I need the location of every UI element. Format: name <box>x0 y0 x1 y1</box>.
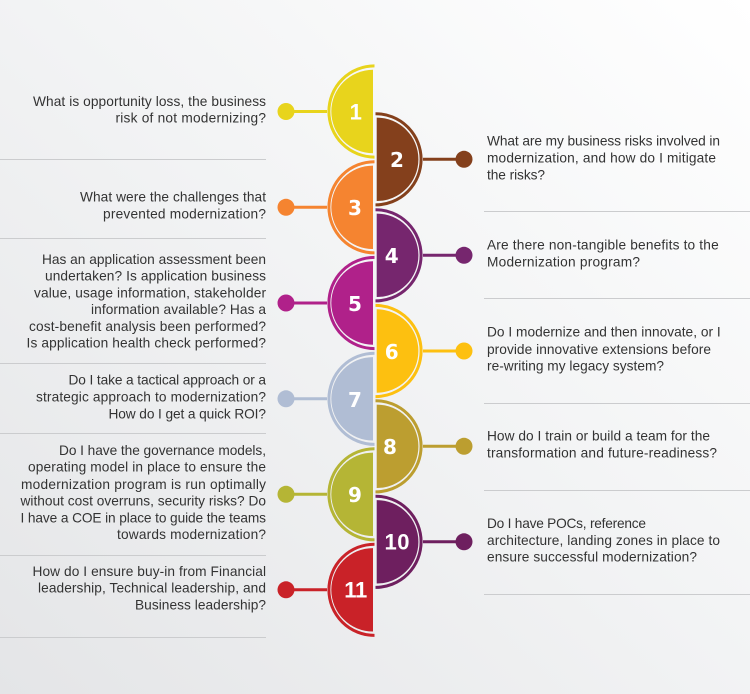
item 10: right semicircle with pointer: 10 <box>384 530 410 555</box>
text: item 7 question: Do I take a tactical approach or a <box>68 373 266 388</box>
item 5: left semicircle with pointer <box>278 257 374 349</box>
item 9: left semicircle with pointer: 9 <box>348 483 362 507</box>
text: item 5 question: cost-benefit analysis been performed? <box>29 319 266 334</box>
text: item 11 question <box>32 564 266 612</box>
item 7: left semicircle with pointer: 7 <box>348 388 362 412</box>
text: item 1 question <box>33 94 266 126</box>
text: item 2 question <box>487 134 720 182</box>
item 7: left semicircle with pointer <box>278 353 374 444</box>
text: item 6 question: Do I modernize and then innovate, or I <box>487 325 721 340</box>
item 11: left semicircle with pointer: 11 <box>344 578 367 603</box>
item 10: right semicircle with pointer <box>376 496 472 587</box>
text: item 11 question: How do I ensure buy-in from Financial <box>32 564 266 579</box>
text: item 7 question: strategic approach to modernization? <box>36 390 266 405</box>
item 8: right semicircle with pointer <box>376 401 472 492</box>
text: item 9 question: operating model in place to ensure the <box>28 460 266 475</box>
text: item 1 question: risk of not modernizing? <box>116 111 266 126</box>
item 6: right semicircle with pointer: 6 <box>385 340 399 364</box>
text: item 5 question: Has an application assessment been <box>42 252 266 267</box>
text: item 4 question: Are there non-tangible benefits to the <box>487 237 719 252</box>
text: item 7 question <box>36 373 266 421</box>
item 6: right semicircle with pointer <box>376 305 472 397</box>
text: item 4 question <box>487 237 719 270</box>
text: item 10 question: Do I have POCs, reference <box>487 516 646 531</box>
item 2: right semicircle with pointer: 2 <box>390 148 404 172</box>
text: item 7 question: How do I get a quick ROI? <box>108 406 266 421</box>
text: item 4 question: Modernization program? <box>487 255 640 270</box>
text: item 10 question: architecture, landing zones in place to <box>487 533 720 548</box>
item 11: left semicircle with pointer <box>278 544 374 635</box>
text: item 5 question: information available? Has a <box>91 302 266 317</box>
text: item 5 question: Is application health check performed? <box>26 336 266 351</box>
text: item 3 question: What were the challenges that <box>80 190 266 205</box>
text: item 3 question: prevented modernization? <box>103 206 266 221</box>
item 1: left semicircle with pointer <box>278 66 374 157</box>
item 4: right semicircle with pointer: 4 <box>385 244 399 268</box>
item 1: left semicircle with pointer: 1 <box>350 99 362 124</box>
item 8: right semicircle with pointer: 8 <box>383 435 397 459</box>
text: item 3 question <box>80 190 266 221</box>
text: item 9 question: Do I have the governance models, <box>59 443 266 458</box>
text: item 9 question: I have a COE in place to guide the teams <box>20 510 266 525</box>
item 3: left semicircle with pointer: 3 <box>348 196 362 220</box>
text: item 8 question <box>487 429 717 461</box>
text: item 6 question <box>487 325 721 374</box>
text: item 9 question: modernization program is run optimally <box>21 477 266 492</box>
item 3: left semicircle with pointer <box>278 162 374 253</box>
text: item 9 question <box>20 443 266 542</box>
text: item 5 question: value, usage information, stakeholder <box>34 285 266 300</box>
text: item 1 question: What is opportunity loss, the business <box>33 94 266 109</box>
text: item 11 question: leadership, Technical leadership, and <box>38 581 266 596</box>
text: item 2 question: modernization, and how do I mitigate <box>487 150 716 165</box>
text: item 9 question: towards modernization? <box>117 527 266 542</box>
text: item 5 question: undertaken? Is application business <box>45 269 266 284</box>
text: item 10 question: ensure successful modernization? <box>487 550 697 565</box>
text: item 9 question: without cost overruns, security risks? Do <box>20 494 266 509</box>
item 5: left semicircle with pointer: 5 <box>348 292 362 316</box>
item 4: right semicircle with pointer <box>376 210 472 301</box>
text: item 6 question: provide innovative extensions before <box>487 342 711 357</box>
text: item 8 question: transformation and future-readiness? <box>487 446 717 461</box>
text: item 10 question <box>487 516 720 565</box>
text: item 5 question <box>26 252 266 351</box>
item 2: right semicircle with pointer <box>376 114 472 205</box>
text: item 8 question: How do I train or build a team for the <box>487 429 710 444</box>
text: item 2 question: the risks? <box>487 167 545 182</box>
text: item 2 question: What are my business risks involved in <box>487 134 720 149</box>
text: item 11 question: Business leadership? <box>135 597 266 612</box>
item 9: left semicircle with pointer <box>278 449 374 540</box>
text: item 6 question: re-writing my legacy system? <box>487 359 664 374</box>
